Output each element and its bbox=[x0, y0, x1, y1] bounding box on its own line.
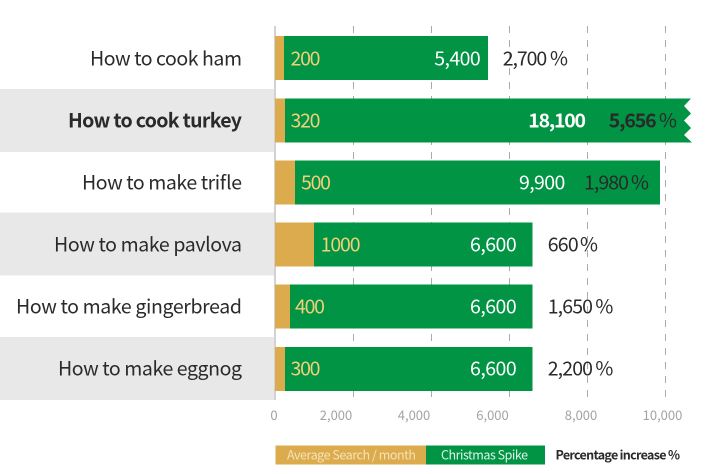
row: How to make gingerbread bbox=[16, 284, 613, 328]
row: How to cook ham: 5,400 bbox=[434, 42, 481, 72]
row: How to cook turkey: 18,100 bbox=[528, 104, 586, 134]
row: How to make gingerbread: How to make gingerbread bbox=[16, 290, 242, 320]
legend bbox=[276, 444, 680, 464]
row: How to make pavlova bbox=[54, 222, 598, 266]
row: How to make eggnog: 300 bbox=[290, 352, 320, 382]
legend: Average Search / month bbox=[287, 444, 416, 464]
row: How to cook ham: How to cook ham bbox=[90, 42, 242, 72]
row: How to make gingerbread: 1,650 bbox=[548, 290, 593, 320]
row: How to make eggnog: 6,600 bbox=[470, 352, 517, 382]
row: How to make eggnog: How to make eggnog bbox=[58, 352, 242, 382]
legend: Percentage increase % bbox=[556, 444, 680, 464]
row: How to make trifle: % bbox=[631, 166, 649, 196]
row: How to make trifle: 1,980 bbox=[584, 166, 629, 196]
row: How to make trifle: How to make trifle bbox=[82, 166, 242, 196]
row: How to cook turkey bbox=[68, 98, 692, 142]
row: How to cook ham: % bbox=[550, 42, 568, 72]
legend: Christmas Spike bbox=[441, 444, 528, 464]
row: How to make gingerbread: % bbox=[595, 290, 613, 320]
row: How to make gingerbread: 400 bbox=[295, 290, 325, 320]
row: How to cook turkey: 5,656 bbox=[609, 104, 657, 134]
row: How to make pavlova: How to make pavlova bbox=[54, 228, 242, 258]
x axis labels: 2,000 bbox=[320, 405, 352, 424]
x axis labels: 10,000 bbox=[643, 405, 682, 424]
x axis labels: 4,000 bbox=[398, 405, 430, 424]
row: How to make pavlova: 1000 bbox=[321, 228, 361, 258]
row: How to make eggnog: 2,200 bbox=[548, 352, 593, 382]
x axis labels: 0 bbox=[270, 405, 278, 424]
row: How to cook turkey: % bbox=[659, 104, 677, 134]
row: How to cook ham bbox=[90, 36, 568, 80]
row: How to make gingerbread: 6,600 bbox=[470, 290, 517, 320]
x axis labels bbox=[270, 405, 682, 424]
row: How to cook turkey: 320 bbox=[290, 104, 320, 134]
row: How to cook turkey: How to cook turkey bbox=[68, 104, 242, 134]
row: How to make pavlova: 6,600 bbox=[470, 228, 517, 258]
row: How to cook ham: 200 bbox=[290, 42, 320, 72]
row: How to make pavlova: % bbox=[580, 228, 598, 258]
row: How to cook ham: 2,700 bbox=[503, 42, 547, 72]
row: How to make trifle: 9,900 bbox=[519, 166, 565, 196]
row: How to make pavlova: 660 bbox=[548, 228, 579, 258]
row: How to make eggnog: % bbox=[595, 352, 613, 382]
row: How to make trifle bbox=[82, 160, 660, 204]
x axis labels: 8,000 bbox=[565, 405, 597, 424]
x axis labels: 6,000 bbox=[476, 405, 509, 424]
row: How to make trifle: 500 bbox=[301, 166, 331, 196]
row: How to make eggnog bbox=[58, 347, 613, 391]
